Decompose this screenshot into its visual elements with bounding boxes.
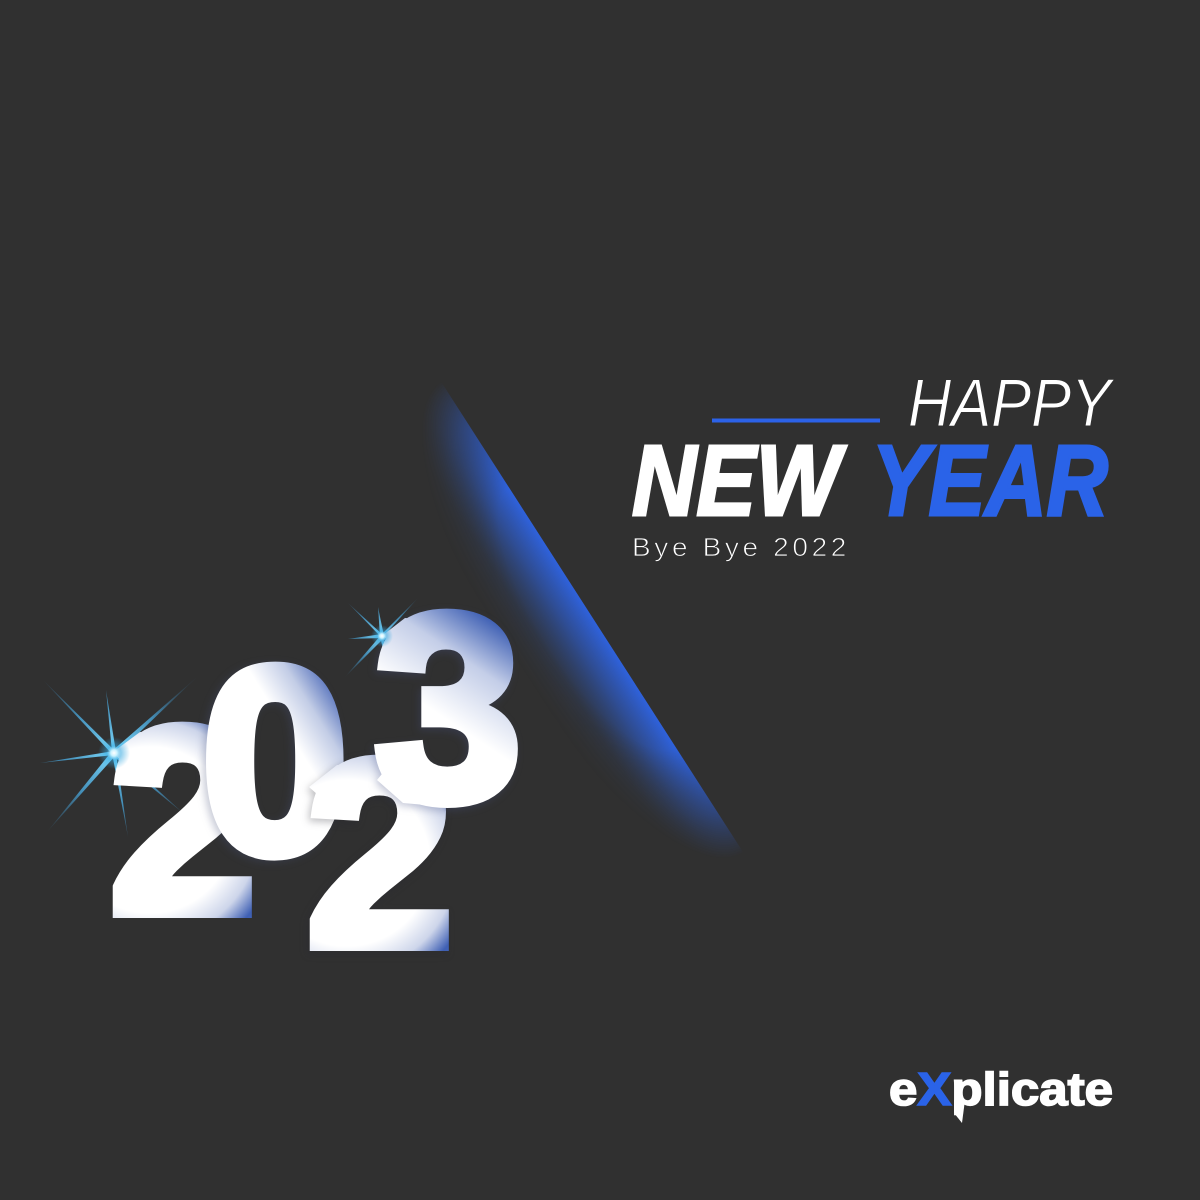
- accent line: [712, 418, 880, 422]
- year digits 2023: [110, 560, 521, 1001]
- digit: 3: 3: [375, 560, 521, 855]
- heading: NEW YEAR: NEW: [632, 425, 847, 537]
- heading: HAPPY: HAPPY: [908, 365, 1115, 441]
- digit: second 2: 2: [307, 706, 453, 1001]
- logo: eXplicate: eXplicate: [889, 1063, 1113, 1115]
- digit: 0: 0: [202, 613, 348, 908]
- heading: NEW YEAR: [632, 425, 1108, 537]
- sparkle: right star rays: [345, 598, 428, 677]
- subheading: Bye Bye 2022: [632, 532, 850, 562]
- digit: first 2: 2: [110, 673, 256, 968]
- sparkle: left star core: [98, 737, 130, 769]
- sparkle: right star core: [371, 625, 393, 647]
- sparkle: left star rays: [40, 677, 197, 837]
- heading: NEW YEAR: YEAR: [872, 425, 1108, 537]
- blue light wedge: [430, 387, 740, 852]
